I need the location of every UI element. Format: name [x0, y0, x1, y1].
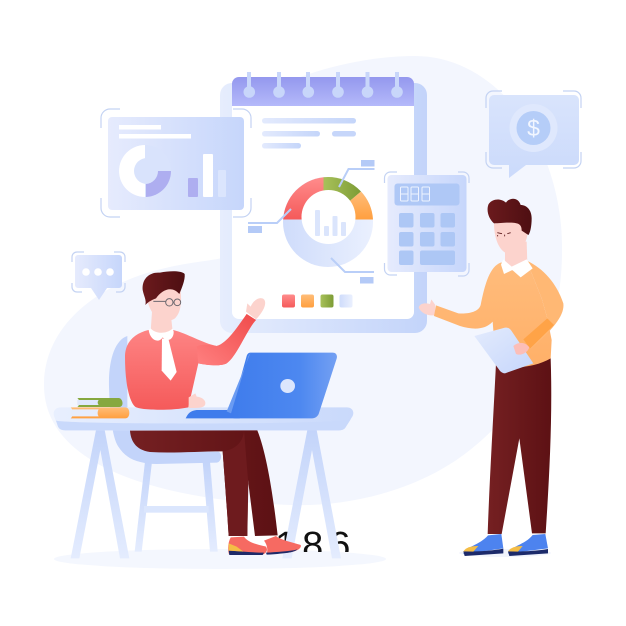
books	[71, 398, 129, 418]
pie chart	[119, 145, 171, 197]
neck and collar	[149, 307, 174, 341]
report heading lines	[119, 125, 161, 130]
panel: left report card	[101, 109, 251, 217]
ground shadow: standing man	[459, 549, 551, 557]
torso and arm	[125, 314, 256, 410]
legend squares	[282, 294, 352, 308]
bar chart	[188, 154, 226, 197]
shoes	[463, 534, 548, 556]
head	[494, 222, 527, 254]
text lines	[262, 118, 356, 148]
spiral rings	[244, 72, 403, 98]
calculator display	[394, 184, 460, 206]
hair	[488, 199, 532, 235]
laptop	[186, 353, 337, 418]
hand on desk	[189, 393, 205, 408]
corner brackets	[486, 91, 581, 168]
background blob	[44, 56, 562, 505]
collar	[501, 259, 533, 277]
sweater	[434, 261, 563, 367]
tie	[162, 339, 177, 381]
icon: dollar speech bubble	[486, 91, 581, 178]
standing man	[419, 199, 563, 556]
callout: upper right	[339, 160, 374, 187]
shoes	[228, 536, 301, 555]
clipboard	[474, 328, 533, 373]
right hand	[513, 343, 529, 355]
display digits	[400, 187, 430, 201]
calculator keys	[399, 213, 455, 265]
seated man at desk	[54, 271, 353, 558]
chair	[109, 336, 221, 552]
notebook frame	[220, 83, 427, 333]
desk	[54, 407, 353, 558]
head	[146, 286, 181, 321]
notebook header	[232, 77, 414, 106]
corner brackets	[384, 172, 469, 276]
callout: left	[248, 209, 291, 233]
left hand	[419, 299, 435, 315]
icon: chat bubble	[72, 252, 125, 300]
dollar sign: $	[527, 115, 540, 141]
donut centre bars	[315, 210, 346, 236]
ground shadow: desk	[54, 549, 386, 569]
illustration: business analytics meeting	[44, 56, 582, 569]
trousers	[130, 430, 278, 536]
hair	[143, 271, 185, 305]
notebook panel	[220, 72, 427, 333]
raised hand	[246, 298, 265, 319]
clipped numbers: 186	[275, 525, 356, 567]
neck	[505, 242, 527, 271]
face details	[497, 233, 511, 236]
panel: calculator	[384, 172, 469, 276]
callout: lower right	[331, 258, 374, 284]
corner brackets	[72, 252, 125, 292]
corner brackets	[101, 109, 251, 217]
notebook page	[232, 106, 414, 319]
glasses	[153, 299, 181, 306]
donut chart	[283, 177, 373, 267]
trousers	[488, 358, 551, 534]
